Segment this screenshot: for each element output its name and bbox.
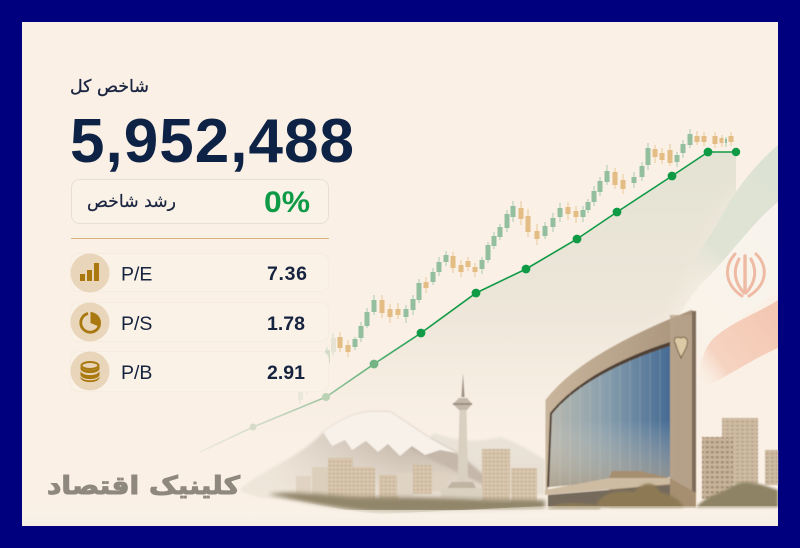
- background towers: [722, 418, 758, 484]
- podium: [609, 471, 696, 508]
- metric row: P/E: 7.36: [267, 263, 307, 285]
- metric row: P/E: P/E: [121, 264, 152, 286]
- ground haze: [22, 510, 778, 526]
- growth box: [72, 180, 328, 224]
- stone crown: [546, 310, 696, 505]
- green candles: [352, 129, 727, 350]
- Milad tower: [441, 373, 482, 498]
- title: شاخص کل: [70, 77, 149, 97]
- metric row: P/E: [70, 254, 328, 292]
- candlestick chart: [298, 129, 734, 404]
- growth box: 0%: [264, 186, 310, 219]
- area under index line: [200, 152, 736, 470]
- growth box: رشد شاخص: [87, 192, 176, 212]
- icon: pie chart: [70, 302, 110, 342]
- main index value: 5,952,488: [70, 107, 354, 176]
- metric row: P/S: 1.78: [267, 313, 305, 335]
- tree line: [268, 482, 778, 513]
- flag of Iran: [665, 145, 778, 390]
- metric row: P/B: P/B: [121, 362, 152, 384]
- icon: flag emblem: [727, 254, 764, 296]
- city buildings: [296, 449, 537, 504]
- icon: bar chart: [70, 254, 110, 292]
- glass facade: [548, 346, 670, 487]
- metric row: P/B: [70, 352, 328, 392]
- facade grid: [560, 349, 660, 486]
- metric row: P/S: P/S: [121, 313, 152, 335]
- metric row: P/S: [70, 302, 328, 342]
- main mountain: [240, 412, 505, 507]
- emblem: [674, 337, 687, 358]
- watermark: کلینیک اقتصاد: [47, 471, 241, 500]
- index line chart: [200, 148, 740, 452]
- area right edge fade: [699, 284, 701, 286]
- divider: [71, 238, 329, 239]
- ground mist: [22, 492, 778, 526]
- icon: coin stack: [70, 352, 110, 390]
- orange candles: [338, 131, 734, 357]
- distant mountains: [420, 433, 545, 495]
- central bank building: [545, 310, 778, 508]
- metric row: P/B: 2.91: [267, 362, 305, 384]
